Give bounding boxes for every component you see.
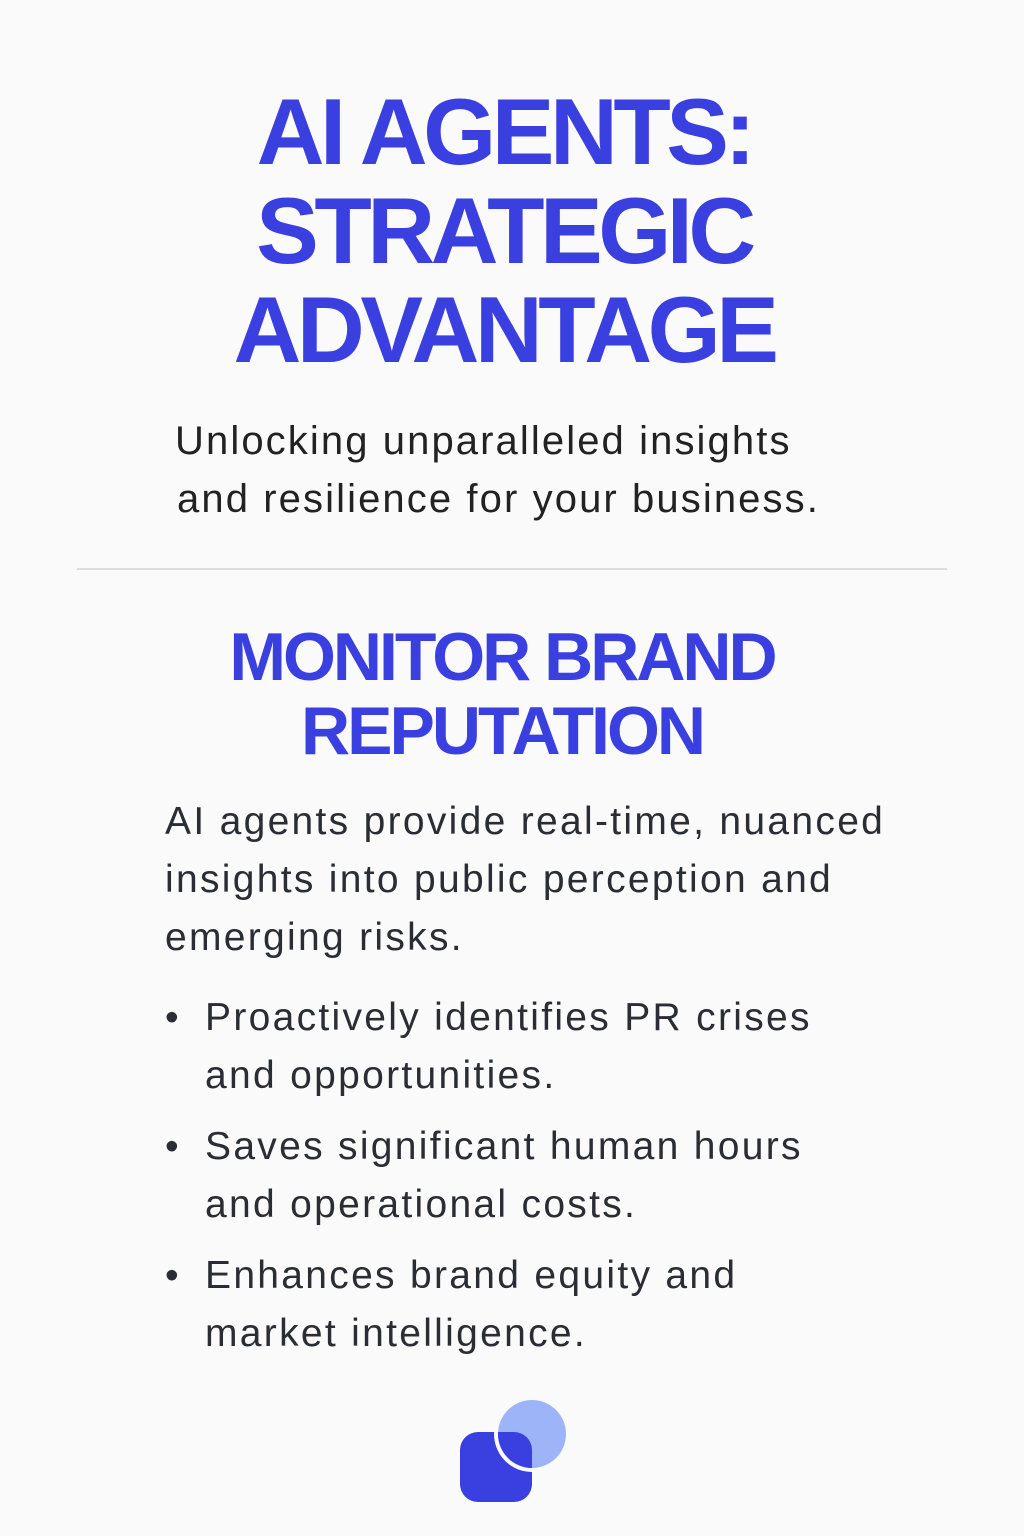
bullet 2: •	[165, 1125, 181, 1168]
bullet 3: •	[165, 1254, 181, 1297]
bullet list: Saves significant human hours	[205, 1125, 803, 1168]
subtitle: and resilience for your business.	[177, 477, 820, 521]
body text: emerging risks.	[165, 916, 464, 959]
bullet list: Enhances brand equity and	[205, 1254, 737, 1297]
icon: logo	[460, 1400, 566, 1502]
subtitle: Unlocking unparalleled insights	[175, 419, 792, 463]
section heading: MONITOR BRAND	[229, 619, 775, 695]
subtitle	[175, 419, 820, 521]
bullet list: Proactively identifies PR crises	[205, 996, 812, 1039]
bullet list: and opportunities.	[205, 1054, 556, 1097]
bullet list: and operational costs.	[205, 1183, 637, 1226]
title: AI AGENTS:	[257, 79, 751, 184]
bullet 1: •	[165, 996, 181, 1039]
title: ADVANTAGE	[234, 277, 774, 382]
body text	[165, 800, 885, 959]
section heading	[229, 619, 775, 769]
title	[234, 79, 776, 382]
title: STRATEGIC	[256, 178, 752, 283]
body text: insights into public perception and	[165, 858, 833, 901]
body text: AI agents provide real-time, nuanced	[165, 800, 885, 843]
section heading: REPUTATION	[301, 693, 703, 769]
bullet list	[165, 996, 812, 1355]
bullet list: market intelligence.	[205, 1312, 587, 1355]
